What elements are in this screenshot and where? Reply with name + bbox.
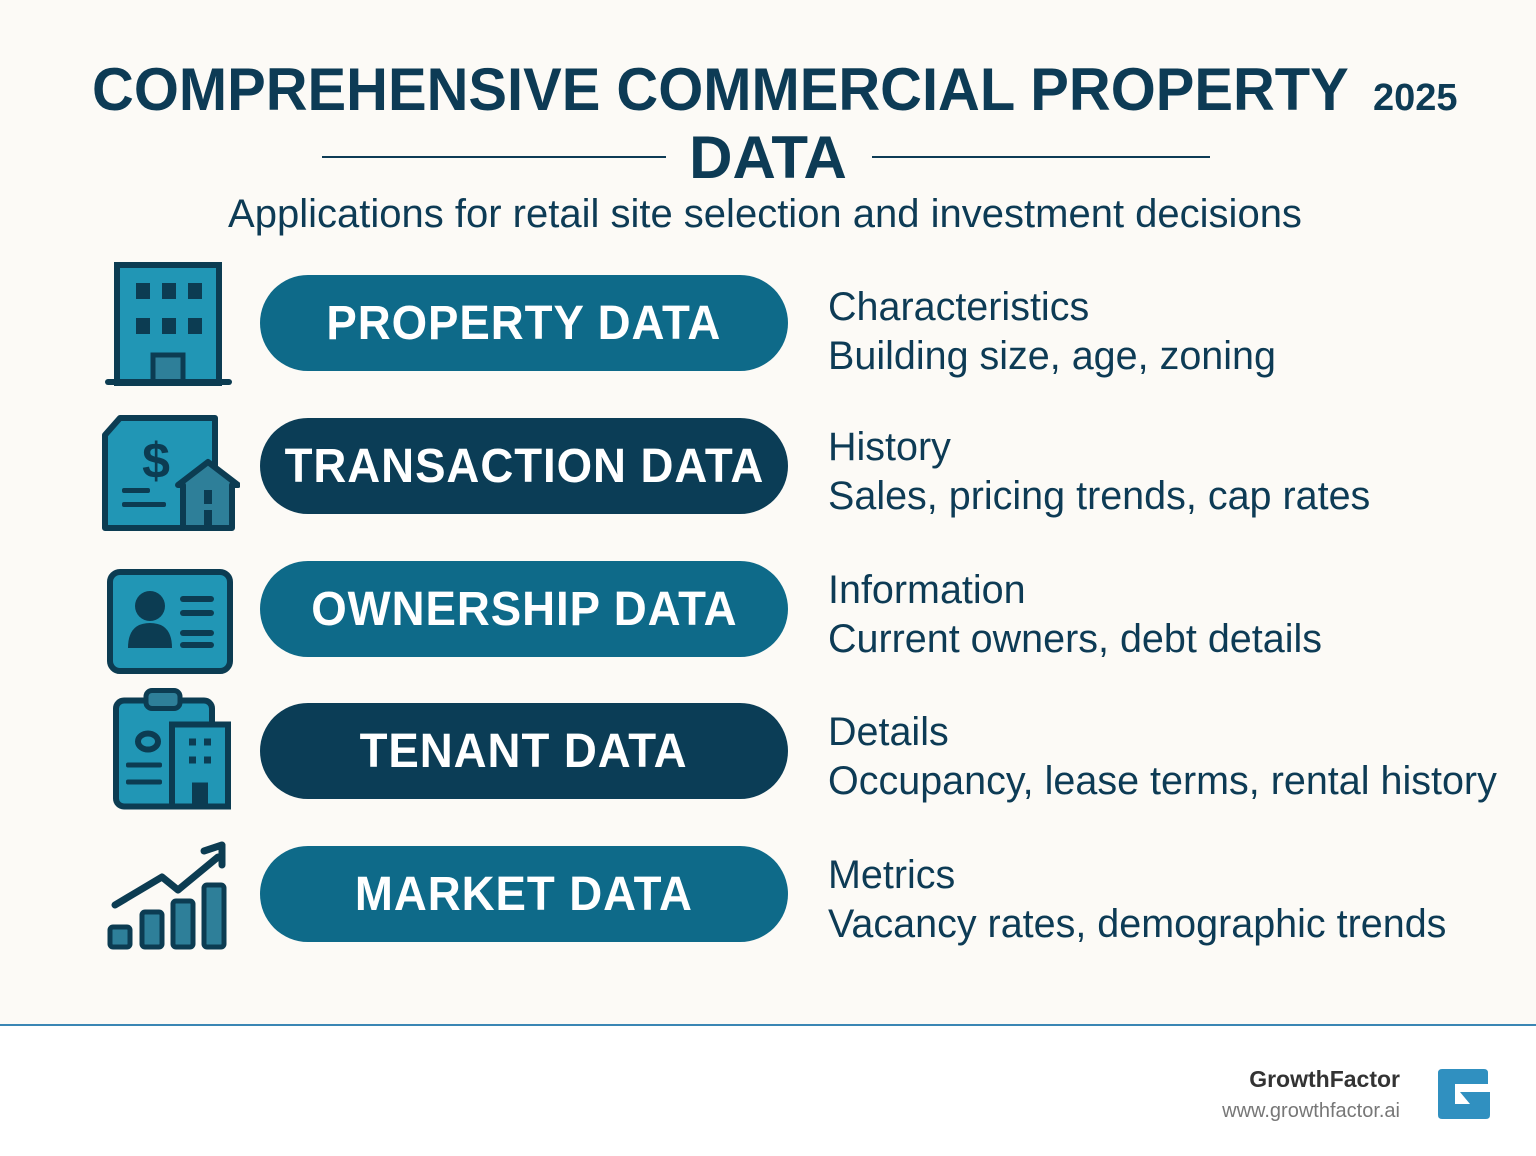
subtitle: Applications for retail site selection and investment decisions xyxy=(228,192,1302,236)
text: ownership: Information xyxy=(828,568,1026,612)
text: market xyxy=(828,853,1446,946)
icon: logo xyxy=(1438,1069,1490,1119)
text: market: Vacancy rates, demographic trends xyxy=(828,902,1446,946)
text: tenant xyxy=(828,710,1497,803)
text: transaction: Sales, pricing trends, cap rates xyxy=(828,474,1370,518)
text: transaction: History xyxy=(828,425,951,469)
pill: tenant data xyxy=(260,703,788,799)
title xyxy=(92,56,1458,191)
text: tenant: Details xyxy=(828,710,949,754)
text: market: Metrics xyxy=(828,853,955,897)
text: ownership: Current owners, debt details xyxy=(828,617,1322,661)
text: property xyxy=(828,285,1276,378)
text: property: Characteristics xyxy=(828,285,1089,329)
pill: transaction data: TRANSACTION DATA xyxy=(284,440,764,492)
brand name: GrowthFactor xyxy=(1249,1066,1400,1092)
title: DATA xyxy=(689,124,847,191)
icon: transaction xyxy=(102,415,240,531)
pill: property data: PROPERTY DATA xyxy=(327,296,721,350)
icon: transaction: $ xyxy=(142,433,170,489)
icon: building xyxy=(105,262,232,386)
icon: market chart xyxy=(108,842,226,950)
icon: ownership card xyxy=(107,569,233,674)
text: transaction xyxy=(828,425,1370,518)
pill: property data xyxy=(260,275,788,371)
text: property: Building size, age, zoning xyxy=(828,334,1276,378)
text: ownership xyxy=(828,568,1322,661)
pill: market data xyxy=(260,846,788,942)
icon: tenant xyxy=(113,688,231,810)
text: tenant: Occupancy, lease terms, rental history xyxy=(828,759,1497,803)
pill: market data: MARKET DATA xyxy=(355,868,693,920)
pill: ownership data: OWNERSHIP DATA xyxy=(311,582,737,636)
pill: ownership data xyxy=(260,561,788,657)
title: COMPREHENSIVE COMMERCIAL PROPERTY xyxy=(92,56,1349,123)
pill: transaction data xyxy=(260,418,788,514)
brand url: www.growthfactor.ai xyxy=(1222,1100,1400,1122)
footer xyxy=(0,1024,1536,1156)
title: 2025 xyxy=(1373,77,1458,119)
pill: tenant data: TENANT DATA xyxy=(360,724,688,778)
